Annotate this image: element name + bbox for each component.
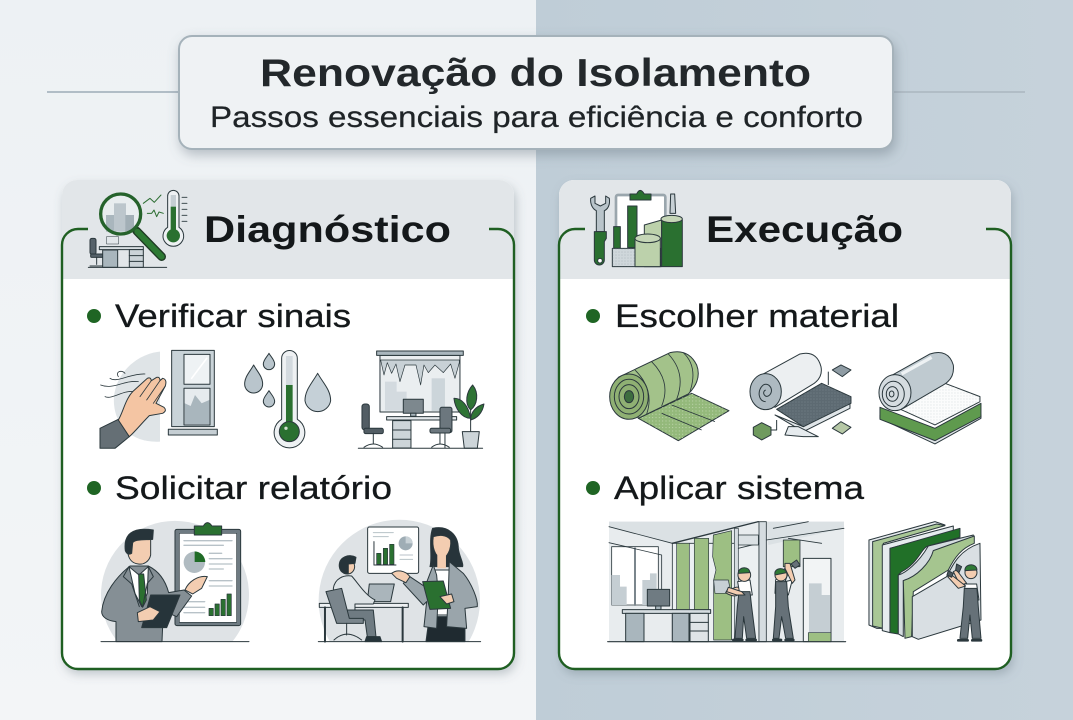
panel: diagnóstico <box>62 180 514 669</box>
icon: green mineral wool roll <box>610 352 729 441</box>
bullet: Aplicar sistema: Aplicar sistema <box>614 470 864 506</box>
icon: layered wall build-up with installer <box>869 522 981 640</box>
title: Renovação do Isolamento <box>260 52 811 95</box>
bullet: Escolher material: Escolher material <box>615 298 899 334</box>
icon: mouldy office window <box>358 351 484 448</box>
icon: foil-faced roll on layered boards <box>879 353 981 444</box>
title box <box>179 36 893 149</box>
panel: execução <box>559 180 1011 669</box>
panel header band <box>62 180 514 279</box>
heading: Execução: Execução <box>706 209 903 250</box>
panel green outline <box>62 229 514 669</box>
header rule lines <box>47 91 1025 93</box>
panel header band <box>559 180 1011 279</box>
icon: grey insulation roll with tiles <box>750 353 851 440</box>
bullet: Solicitar relatório: Solicitar relatório <box>115 470 392 506</box>
heading: Diagnóstico: Diagnóstico <box>204 209 451 250</box>
icon: thermometer and humidity drops <box>245 350 331 448</box>
bullet: Verificar sinais: Verificar sinais <box>115 298 351 334</box>
panel green outline <box>559 229 1011 669</box>
panel card <box>62 180 514 669</box>
icon: tools, clipboard and insulation rolls <box>591 190 682 267</box>
icon: magnifier, thermometer and desk <box>88 190 187 267</box>
icon: consultant explaining results to a client <box>318 520 481 642</box>
panel card <box>559 180 1011 669</box>
icon: installers fitting insulation inside an office <box>608 522 846 642</box>
icon: hand feeling a draught at the window <box>100 350 217 448</box>
icon: consultant presenting a clipboard report <box>101 521 249 642</box>
subtitle: Passos essenciais para eficiência e conforto <box>210 101 863 134</box>
